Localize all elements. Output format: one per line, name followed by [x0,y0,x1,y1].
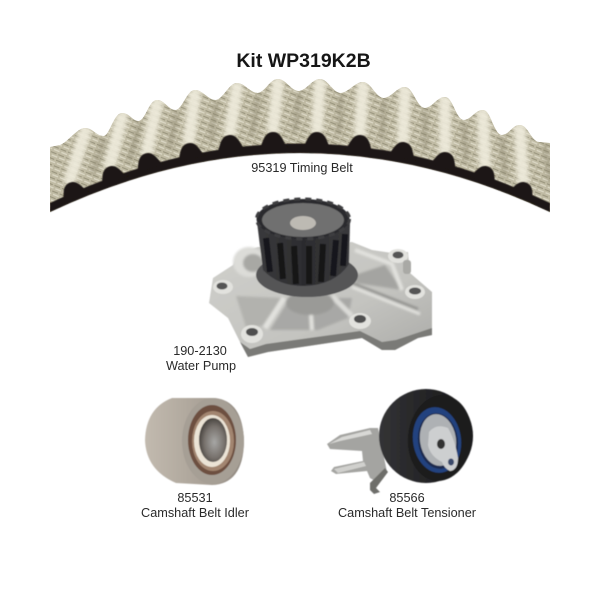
tensioner label [338,491,477,520]
idler label [141,491,250,520]
idler bore [199,418,227,462]
pump gear [256,199,350,286]
idler body [145,398,244,485]
pump housing [209,242,432,357]
belt tensioner [327,389,476,494]
tensioner label: 85566 [389,491,425,505]
pump bolt holes [213,249,425,343]
tensioner hub [417,412,459,468]
idler label: 85531 [177,491,213,505]
idler pulley [145,398,244,485]
belt backing and teeth notches [50,131,550,212]
timing belt label: 95319 Timing Belt [251,161,353,175]
idler face [182,398,244,484]
timing belt [50,79,550,212]
tensioner label: Camshaft Belt Tensioner [338,506,477,520]
water pump [209,199,432,357]
water pump label: 190-2130 [173,344,227,358]
idler label: Camshaft Belt Idler [141,506,250,520]
water pump label: Water Pump [166,359,236,373]
tensioner bracket [327,428,387,482]
title: Kit WP319K2B [236,50,371,72]
pump flange [256,253,358,297]
pump ribs and recesses [233,247,420,330]
water pump label [166,344,236,373]
tensioner blue seal [409,404,465,476]
tensioner pulley [379,389,473,483]
